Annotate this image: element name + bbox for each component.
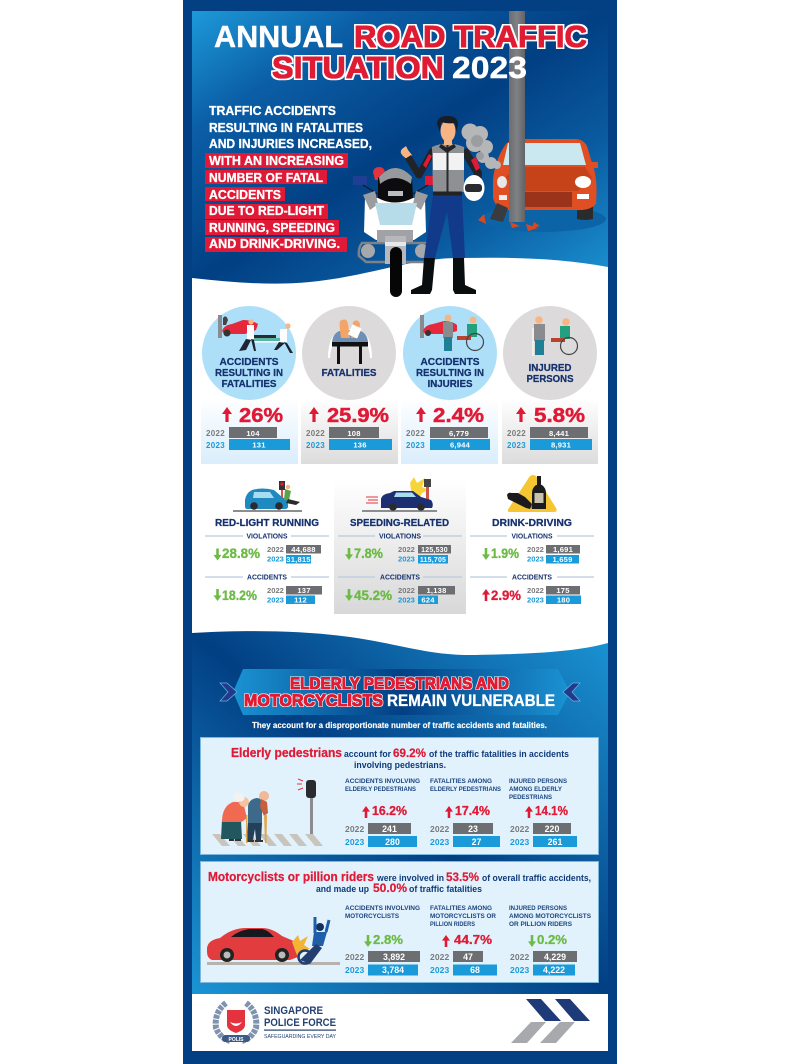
stat: 2022 — [206, 429, 225, 438]
violations stat: 7.8% — [354, 546, 383, 561]
text block: elderly summary — [231, 746, 569, 770]
stat: fatalities among motorcyclists: 44.7% — [454, 932, 492, 947]
stat: 6,944 — [450, 440, 471, 450]
panel: accidents resulting in injuries — [401, 306, 498, 464]
panel: drink-driving — [470, 475, 594, 604]
panel: fatalities — [301, 306, 398, 464]
text block: elderly summary: Elderly pedestrians — [231, 746, 342, 760]
text block: motorcyclists summary — [208, 870, 591, 895]
illustration: car hitting motorcyclist — [207, 917, 340, 965]
accidents stat: 1,138 — [426, 586, 447, 595]
stat: 8,441 — [549, 429, 570, 438]
accidents stat: 2022 — [267, 586, 284, 595]
label: INJURIES — [428, 378, 472, 390]
accidents stat: ACCIDENTS — [380, 574, 420, 582]
stat: fatalities among elderly pedestrians: ELDERLY PEDESTRIANS — [430, 786, 502, 793]
illustration: elderly couple on crossing — [212, 791, 323, 846]
label: INJURED — [528, 362, 572, 374]
stat: 26% — [239, 405, 283, 427]
illustration: smoke — [462, 124, 501, 169]
text block: hero summary: RUNNING, SPEEDING — [209, 220, 335, 235]
stat: 25.9% — [327, 405, 389, 427]
violations stat: VIOLATIONS — [512, 534, 553, 540]
accidents stat: ACCIDENTS — [512, 574, 552, 582]
accidents stat: 45.2% — [354, 588, 392, 603]
accidents stat: 2.9% — [491, 588, 521, 603]
icon: double chevron — [511, 999, 590, 1043]
accidents stat: 2023 — [267, 596, 284, 604]
stat: accidents involving motorcyclists: 2.8% — [373, 932, 403, 947]
accidents stat: 18.2% — [222, 588, 257, 603]
stat: 104 — [246, 429, 260, 438]
accidents stat: 175 — [556, 586, 570, 595]
icon: police crest — [216, 1003, 256, 1043]
violations stat: 1.9% — [491, 546, 519, 561]
stat — [406, 405, 490, 450]
text block: motorcyclists summary: 53.5% — [446, 872, 479, 884]
text block: hero summary: ACCIDENTS — [209, 187, 281, 202]
title: 2023 — [452, 50, 527, 85]
violations stat: 2022 — [267, 545, 284, 554]
text block: motorcyclists summary: and made up — [316, 884, 369, 894]
stat: 2023 — [306, 441, 325, 450]
logo text — [264, 1005, 336, 1040]
stat: injured persons among motorcyclists: 2022 — [510, 952, 529, 962]
stat: accidents involving elderly pedestrians: 16.2% — [372, 803, 407, 818]
heading: RED-LIGHT RUNNING — [215, 517, 319, 529]
violations stat: VIOLATIONS — [246, 534, 288, 540]
violations stat — [205, 534, 329, 564]
accidents stat: 624 — [421, 596, 435, 604]
title: SITUATION — [272, 50, 444, 85]
icon: speeding car — [362, 477, 437, 512]
violations stat: 1,659 — [552, 555, 573, 564]
label: PERSONS — [526, 373, 574, 385]
stat: fatalities among motorcyclists: 2023 — [430, 965, 449, 975]
stat: injured persons among elderly pedestrians: AMONG ELDERLY — [509, 786, 563, 793]
text block: hero summary: DUE TO RED-LIGHT — [209, 203, 324, 218]
label: RESULTING IN — [416, 367, 484, 379]
stat — [306, 405, 392, 450]
stat: accidents involving elderly pedestrians: ACCIDENTS INVOLVING — [345, 778, 420, 785]
accidents stat — [205, 574, 329, 604]
title — [214, 19, 587, 85]
panel: elderly pedestrians — [200, 738, 598, 854]
panel: hero background — [192, 11, 608, 286]
text block: hero summary: NUMBER OF FATAL — [209, 170, 323, 185]
text block: motorcyclists summary: of traffic fatalities — [409, 884, 482, 894]
banner text: ELDERLY PEDESTRIANS AND — [290, 675, 509, 693]
stat: fatalities among motorcyclists: MOTORCYCLISTS OR — [430, 913, 496, 920]
text block: elderly summary: account for — [344, 749, 391, 759]
stat: injured persons among elderly pedestrians: 2022 — [510, 824, 529, 834]
stat: accidents involving elderly pedestrians: ELDERLY PEDESTRIANS — [345, 786, 417, 793]
text block: elderly summary: 69.2% — [393, 748, 426, 760]
stat: accidents involving elderly pedestrians: 2022 — [345, 824, 364, 834]
stat: injured persons among elderly pedestrians: PEDESTRIANS — [509, 794, 553, 801]
text block: motorcyclists summary: of overall traffic accidents, — [482, 873, 591, 883]
text block: motorcyclists summary: Motorcyclists or pillion riders — [208, 870, 374, 884]
accidents stat — [338, 574, 462, 604]
icon: warning triangle, bottle and crashed car — [507, 475, 557, 512]
outer frame — [183, 0, 617, 1064]
text block: hero summary: WITH AN INCREASING — [209, 153, 344, 168]
accidents stat: 2023 — [398, 596, 415, 604]
stat: fatalities among elderly pedestrians: 2023 — [430, 837, 449, 847]
accidents stat: 2022 — [398, 586, 415, 595]
stat: 6,779 — [449, 429, 469, 438]
logo text: POLICE FORCE — [264, 1017, 336, 1029]
violations stat: 2023 — [267, 554, 284, 564]
stat: 131 — [252, 440, 266, 450]
stat: fatalities among elderly pedestrians: 23 — [468, 824, 478, 834]
stat: 2022 — [507, 429, 526, 438]
panel: accidents resulting in fatalities — [201, 306, 298, 464]
stat: injured persons among motorcyclists: INJURED PERSONS — [509, 905, 568, 912]
stat: fatalities among elderly pedestrians: 17.4% — [455, 803, 490, 818]
accidents stat: 2022 — [527, 586, 544, 595]
stat: injured persons among motorcyclists: AMONG MOTORCYCLISTS — [509, 913, 592, 920]
stat: fatalities among elderly pedestrians — [430, 778, 502, 847]
stat: 2023 — [406, 441, 425, 450]
footer — [192, 994, 608, 1051]
stat: accidents involving motorcyclists: 2023 — [345, 965, 364, 975]
accidents stat: 112 — [294, 596, 307, 604]
label: FATALITIES — [222, 378, 276, 390]
stat: fatalities among motorcyclists: PILLION RIDERS — [430, 921, 476, 928]
stat: accidents involving motorcyclists: MOTORCYCLISTS — [345, 913, 400, 920]
text block: hero summary: RESULTING IN FATALITIES — [209, 120, 363, 135]
icon: injured people — [532, 316, 578, 356]
stat: fatalities among motorcyclists: 47 — [463, 952, 473, 962]
stat: accidents involving elderly pedestrians — [345, 778, 420, 847]
stat: 136 — [353, 440, 367, 450]
banner text: REMAIN VULNERABLE — [387, 692, 555, 710]
panel: speeding-related — [334, 477, 466, 614]
stat: accidents involving motorcyclists: 2022 — [345, 952, 364, 962]
violations stat: 2023 — [527, 554, 544, 564]
panel: vulnerable groups background — [192, 631, 608, 994]
stat: fatalities among motorcyclists: 2022 — [430, 952, 449, 962]
stat: accidents involving elderly pedestrians: 241 — [382, 824, 397, 834]
violations stat: 2022 — [398, 545, 415, 554]
illustration: police officer — [401, 116, 484, 294]
banner: elderly pedestrians and motorcyclists — [220, 669, 580, 715]
stat: injured persons among motorcyclists: OR PILLION RIDERS — [509, 921, 573, 928]
label: ACCIDENTS — [420, 356, 480, 368]
stat: 8,931 — [551, 440, 572, 450]
icon: crash and stretcher — [218, 315, 293, 353]
violations stat: 2023 — [398, 554, 415, 564]
text block: elderly summary: of the traffic fatalities in accidents — [429, 749, 569, 759]
accidents stat: 2023 — [527, 596, 544, 604]
stat: injured persons among elderly pedestrians — [509, 778, 577, 847]
accidents stat — [470, 574, 594, 604]
stat: accidents involving elderly pedestrians: 2023 — [345, 837, 364, 847]
text block: hero summary: TRAFFIC ACCIDENTS — [209, 103, 336, 118]
banner text: MOTORCYCLISTS — [244, 692, 383, 710]
stat: 5.8% — [534, 405, 585, 427]
violations stat: VIOLATIONS — [379, 534, 421, 540]
stat: 2.4% — [433, 405, 484, 427]
stat: injured persons among elderly pedestrians: 14.1% — [535, 803, 568, 818]
illustration: lamp post — [509, 11, 525, 222]
stat: accidents involving elderly pedestrians: 280 — [385, 837, 400, 847]
panel: motorcyclists or pillion riders — [200, 862, 598, 982]
text block: motorcyclists summary: 50.0% — [373, 883, 407, 895]
heading: SPEEDING-RELATED — [350, 517, 449, 529]
stat: fatalities among elderly pedestrians: 27 — [472, 837, 481, 847]
illustration: police motorcycle — [353, 167, 437, 297]
icon: crash and injured people — [420, 314, 484, 351]
icon: left chevron — [220, 683, 237, 701]
panel: red-light running — [205, 481, 329, 604]
stat: injured persons among motorcyclists: 4,229 — [544, 952, 566, 962]
label — [526, 362, 574, 385]
icon: car hitting pedestrian at red light — [233, 481, 302, 512]
label — [215, 356, 283, 390]
label: RESULTING IN — [215, 367, 283, 379]
icon: right chevron — [563, 683, 580, 701]
panel: injured persons — [502, 306, 598, 464]
label: ACCIDENTS — [220, 356, 278, 368]
stat: fatalities among motorcyclists — [430, 905, 497, 976]
stat: 2023 — [507, 441, 526, 450]
stat: fatalities among motorcyclists: 68 — [470, 965, 480, 975]
stat — [206, 405, 290, 450]
stat: 2022 — [306, 429, 325, 438]
heading: DRINK-DRIVING — [492, 517, 572, 529]
accidents stat: 137 — [297, 586, 311, 595]
stat: 108 — [347, 429, 361, 438]
illustration: traffic light — [297, 779, 316, 834]
text block: hero summary: AND INJURIES INCREASED, — [209, 136, 372, 151]
icon: mortuary table — [328, 320, 372, 364]
stat: fatalities among elderly pedestrians: 2022 — [430, 824, 449, 834]
logo text: SAFEGUARDING EVERY DAY — [264, 1034, 336, 1040]
subtitle: They account for a disproportionate number of traffic accidents and fatalities. — [252, 720, 547, 730]
violations stat: 115,705 — [420, 557, 446, 564]
stat: injured persons among motorcyclists: 2023 — [510, 965, 529, 975]
accidents stat: ACCIDENTS — [247, 574, 287, 582]
stat: fatalities among elderly pedestrians: FATALITIES AMONG — [430, 778, 492, 785]
stat: injured persons among motorcyclists — [509, 905, 592, 976]
violations stat — [338, 534, 462, 564]
stat: accidents involving motorcyclists: 3,892 — [383, 952, 405, 962]
stat: injured persons among motorcyclists: 0.2% — [537, 932, 567, 947]
stat: injured persons among elderly pedestrians: 2023 — [510, 837, 529, 847]
accidents stat: 180 — [557, 596, 570, 604]
stat: injured persons among elderly pedestrians: 261 — [548, 837, 562, 847]
text block: motorcyclists summary: were involved in — [376, 873, 444, 883]
text block: elderly summary: involving pedestrians. — [354, 760, 446, 770]
violations stat: 2022 — [527, 545, 544, 554]
label: FATALITIES — [322, 367, 376, 379]
violations stat — [470, 534, 594, 564]
violations stat: 1,691 — [553, 545, 574, 554]
stat: injured persons among elderly pedestrians: INJURED PERSONS — [509, 778, 568, 785]
stat: accidents involving motorcyclists: ACCIDENTS INVOLVING — [345, 905, 420, 912]
panel: white stats section — [192, 258, 608, 660]
stat: injured persons among motorcyclists: 4,222 — [543, 965, 565, 975]
stat: accidents involving motorcyclists — [345, 905, 420, 976]
stat: 2022 — [406, 429, 425, 438]
violations stat: 31,815 — [286, 555, 311, 564]
violations stat: 125,530 — [421, 547, 448, 554]
text block: hero summary — [205, 103, 372, 252]
icon: police crest: POLIS — [228, 1037, 244, 1043]
stat: accidents involving motorcyclists: 3,784 — [382, 965, 404, 975]
violations stat: 44,688 — [291, 545, 316, 554]
logo text: SINGAPORE — [264, 1005, 323, 1017]
stat: fatalities among motorcyclists: FATALITIES AMONG — [430, 905, 492, 912]
title: ANNUAL — [214, 19, 343, 54]
stat — [507, 405, 592, 450]
stat: injured persons among elderly pedestrians: 220 — [545, 824, 559, 834]
violations stat: 28.8% — [222, 546, 260, 561]
title: ROAD TRAFFIC — [354, 19, 587, 54]
illustration: crashed car — [478, 139, 606, 232]
label — [416, 356, 484, 390]
stat: 2023 — [206, 441, 225, 450]
banner text — [244, 675, 555, 710]
text block: hero summary: AND DRINK-DRIVING. — [209, 236, 340, 251]
